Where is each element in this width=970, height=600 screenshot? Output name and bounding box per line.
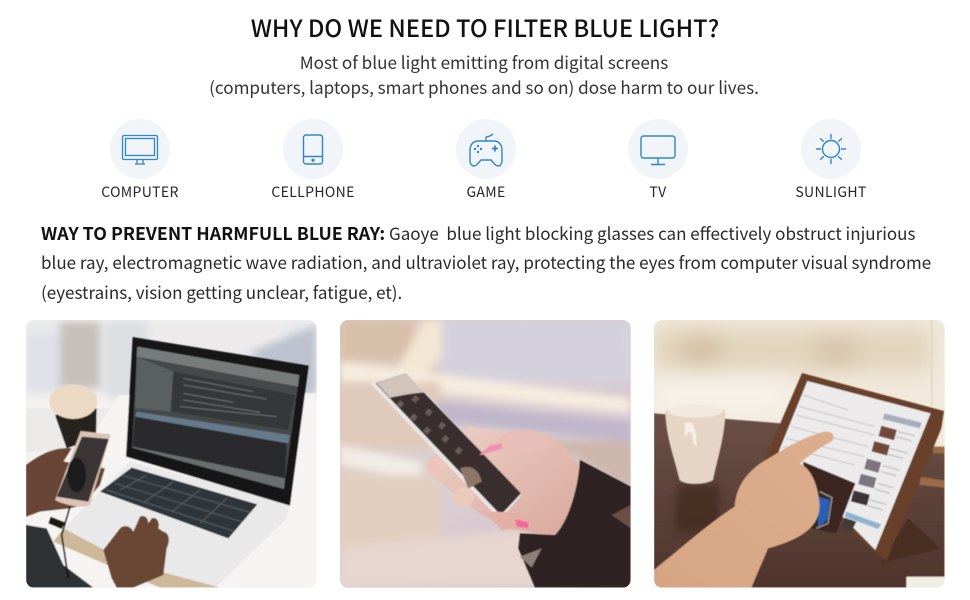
subtitle: (computers, laptops, smart phones and so on) dose harm to our lives.: [209, 74, 759, 99]
index finger and nail: [480, 453, 484, 456]
tablet: [763, 373, 944, 561]
text block: way to prevent harmful blue ray: [41, 220, 931, 304]
title: WHY DO WE NEED TO FILTER BLUE LIGHT?: [251, 10, 719, 44]
icon: computer: [110, 119, 170, 179]
text block: way to prevent harmful blue ray: WAY TO PREVENT HARMFULL BLUE RAY: Gaoye blue light blocking glasses can effectively obstruct injurious: [41, 220, 915, 246]
thumb and fingers: [486, 511, 512, 530]
dark video block and blue phone: [803, 462, 855, 533]
hand: [654, 432, 834, 588]
text block: way to prevent harmful blue ray: blue ray, electromagnetic wave radiation, and ultraviolet ray, protecting the eyes from computer visual syndrome: [41, 249, 931, 274]
phone: [370, 372, 522, 520]
text block: way to prevent harmful blue ray: (eyestrains, vision getting unclear, fatigue, et).: [41, 279, 402, 304]
icon: game controller: [456, 119, 516, 179]
label: sunlight: SUNLIGHT: [795, 182, 867, 202]
page text lines: [783, 395, 875, 465]
subtitle: Most of blue light emitting from digital screens: [300, 49, 668, 74]
right hand: [103, 516, 169, 588]
laptop base: [63, 462, 290, 587]
mug: [665, 407, 725, 484]
coffee cup: [55, 408, 97, 448]
label: computer: COMPUTER: [101, 182, 179, 202]
stand: [881, 518, 941, 563]
label: tv: TV: [649, 182, 667, 202]
icon: tv: [628, 119, 688, 179]
keyboard: [100, 468, 257, 538]
hand: [428, 427, 581, 536]
subtitle: [209, 49, 759, 99]
cable and dark chair: [26, 525, 93, 588]
sleeve: [518, 460, 631, 588]
table: [654, 413, 945, 588]
photo: laptop and smartphone: [26, 320, 317, 588]
photo: hand touching tablet: [654, 320, 945, 588]
left hand: [26, 448, 105, 517]
icon: cellphone: [283, 119, 343, 179]
icon: sun: [801, 119, 861, 179]
photo: hand holding smartphone: [340, 320, 631, 588]
laptop lid: [126, 337, 309, 506]
phone: [55, 431, 111, 507]
label: cellphone: CELLPHONE: [271, 182, 355, 202]
label: game: GAME: [466, 182, 506, 202]
mug reflection: [675, 485, 720, 532]
